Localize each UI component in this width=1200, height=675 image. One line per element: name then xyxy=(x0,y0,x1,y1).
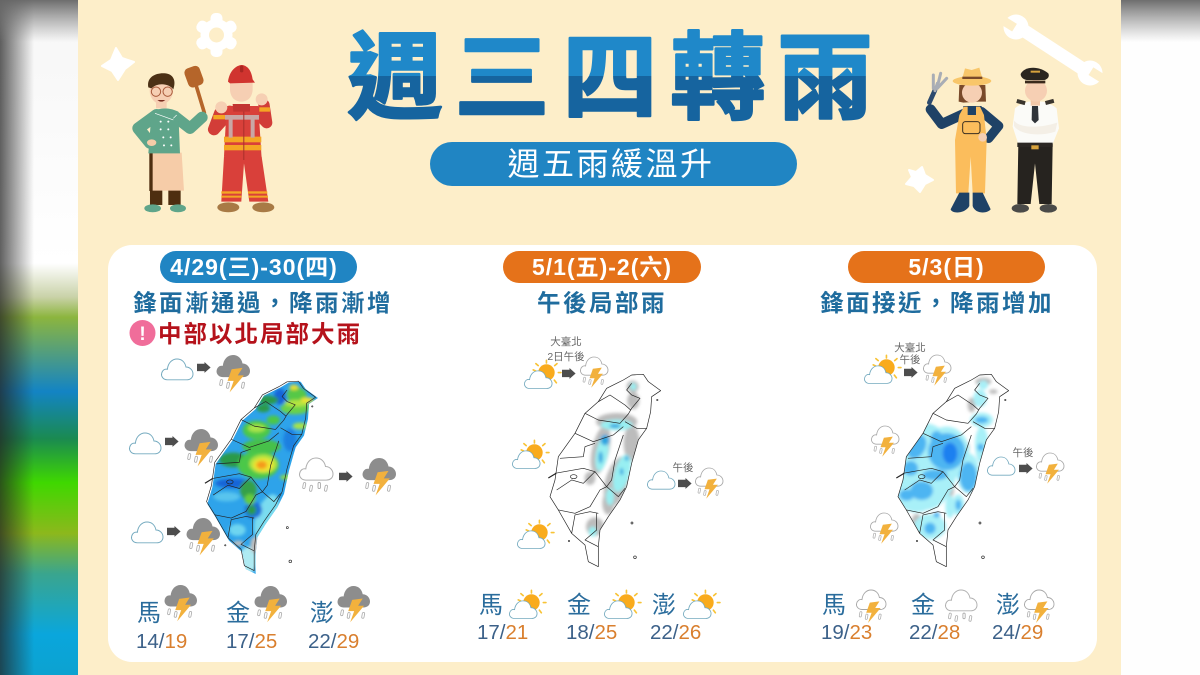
icon: sun and cloud, central xyxy=(512,440,549,468)
outlying islands Penghu xyxy=(308,586,370,653)
label: day 2 afternoon: 2日午後 xyxy=(547,350,585,363)
outlying islands Kinmen: 金 xyxy=(911,592,935,619)
date pill 5/3: 5/3(日) xyxy=(908,254,985,280)
date pill 5/1-2 xyxy=(503,251,701,283)
illustration: firefighter xyxy=(213,65,274,212)
outlying islands Kinmen: 22/28 xyxy=(909,621,960,644)
outlying islands Kinmen: 金 xyxy=(226,600,250,627)
illustration: pilot xyxy=(1012,68,1059,213)
outlying islands Matsu: 馬 xyxy=(137,600,161,627)
weather change row: northern sea xyxy=(162,355,250,392)
weather change row: east xyxy=(300,458,396,495)
heading: front passing: 鋒面漸通過，降雨漸增 xyxy=(133,290,393,316)
heading: front approaching: 鋒面接近，降雨增加 xyxy=(820,290,1054,316)
weather change row: Taipei xyxy=(524,357,608,388)
weather change row: central west xyxy=(130,429,218,466)
icon: white star left xyxy=(102,48,134,80)
weather change row: Taipei xyxy=(864,355,951,386)
panel: 5/1-2 forecast xyxy=(477,251,723,644)
heading: heavy rain warning: 中部以北局部大雨 xyxy=(158,321,362,347)
title: 轉 xyxy=(670,2,766,139)
title: 三 xyxy=(454,2,550,139)
outlying islands Penghu: 22/29 xyxy=(308,630,359,653)
icon: white gear xyxy=(194,13,239,57)
date pill 4/29-30 xyxy=(160,251,357,283)
label: Greater Taipei day 2 afternoon: 大臺北 xyxy=(550,335,582,348)
outlying islands Matsu: 馬 xyxy=(822,592,846,619)
outlying islands Penghu xyxy=(650,590,720,644)
weather change row: east xyxy=(647,468,723,499)
outlying islands Matsu xyxy=(477,590,546,644)
outlying islands Penghu: 澎 xyxy=(310,600,334,627)
label: afternoon: 午後 xyxy=(900,353,920,366)
outlying islands Kinmen: 金 xyxy=(567,592,591,619)
outlying islands Penghu xyxy=(992,590,1054,644)
subtitle pill: 週五雨緩溫升 xyxy=(507,146,715,182)
map: Taiwan rainfall 5/3 xyxy=(893,374,1009,567)
blurred background strip: right xyxy=(1121,0,1200,675)
weather change row: east xyxy=(987,453,1064,484)
icon: thunder shower, south xyxy=(870,513,898,544)
heading: afternoon showers: 午後局部雨 xyxy=(537,290,667,316)
title: 週 xyxy=(347,2,443,139)
outlying islands Penghu: 22/26 xyxy=(650,621,701,644)
outlying islands Kinmen: 17/25 xyxy=(226,630,277,653)
label: Greater Taipei: 大臺北 xyxy=(894,341,926,354)
outlying islands Kinmen xyxy=(909,590,977,644)
weather change row: southwest xyxy=(132,518,220,555)
label: afternoon east: 午後 xyxy=(672,461,694,474)
illustration: chef xyxy=(138,65,205,212)
outlying islands Matsu xyxy=(821,590,886,644)
alert icon: ! xyxy=(139,324,146,345)
title xyxy=(347,2,873,139)
title: 雨 xyxy=(777,2,873,139)
subtitle pill xyxy=(430,142,797,186)
map: Taiwan rainfall 5/1-2 xyxy=(548,374,661,567)
icon: white star right xyxy=(906,167,933,192)
panel: 5/3 forecast xyxy=(820,251,1064,644)
title: 四 xyxy=(562,2,658,139)
outlying islands Kinmen xyxy=(226,586,287,653)
blurred background strip: left xyxy=(0,0,78,675)
outlying islands Penghu: 24/29 xyxy=(992,621,1043,644)
outlying islands Matsu: 14/19 xyxy=(136,630,187,653)
date pill 5/1-2: 5/1(五)-2(六) xyxy=(532,254,672,280)
outlying islands Kinmen xyxy=(566,590,641,644)
label: afternoon east: 午後 xyxy=(1012,446,1034,459)
date pill 5/3 xyxy=(848,251,1045,283)
alert icon xyxy=(130,320,156,346)
date pill 4/29-30: 4/29(三)-30(四) xyxy=(170,254,338,280)
white content panel xyxy=(108,245,1097,662)
icon: thunder shower, central xyxy=(871,426,899,457)
outlying islands Kinmen: 18/25 xyxy=(566,621,617,644)
outlying islands Matsu: 19/23 xyxy=(821,621,872,644)
outlying islands Penghu: 澎 xyxy=(652,592,676,619)
illustration: farmer xyxy=(929,68,999,212)
icon: white wrench xyxy=(999,14,1107,86)
icon: sun and cloud, south xyxy=(517,520,554,548)
outlying islands Matsu xyxy=(136,585,197,653)
outlying islands Matsu: 馬 xyxy=(479,592,503,619)
outlying islands Matsu: 17/21 xyxy=(477,621,528,644)
outlying islands Penghu: 澎 xyxy=(996,592,1020,619)
map: Taiwan rainfall 4/29-30 xyxy=(204,380,318,574)
panel: 4/29-30 forecast xyxy=(130,251,396,653)
